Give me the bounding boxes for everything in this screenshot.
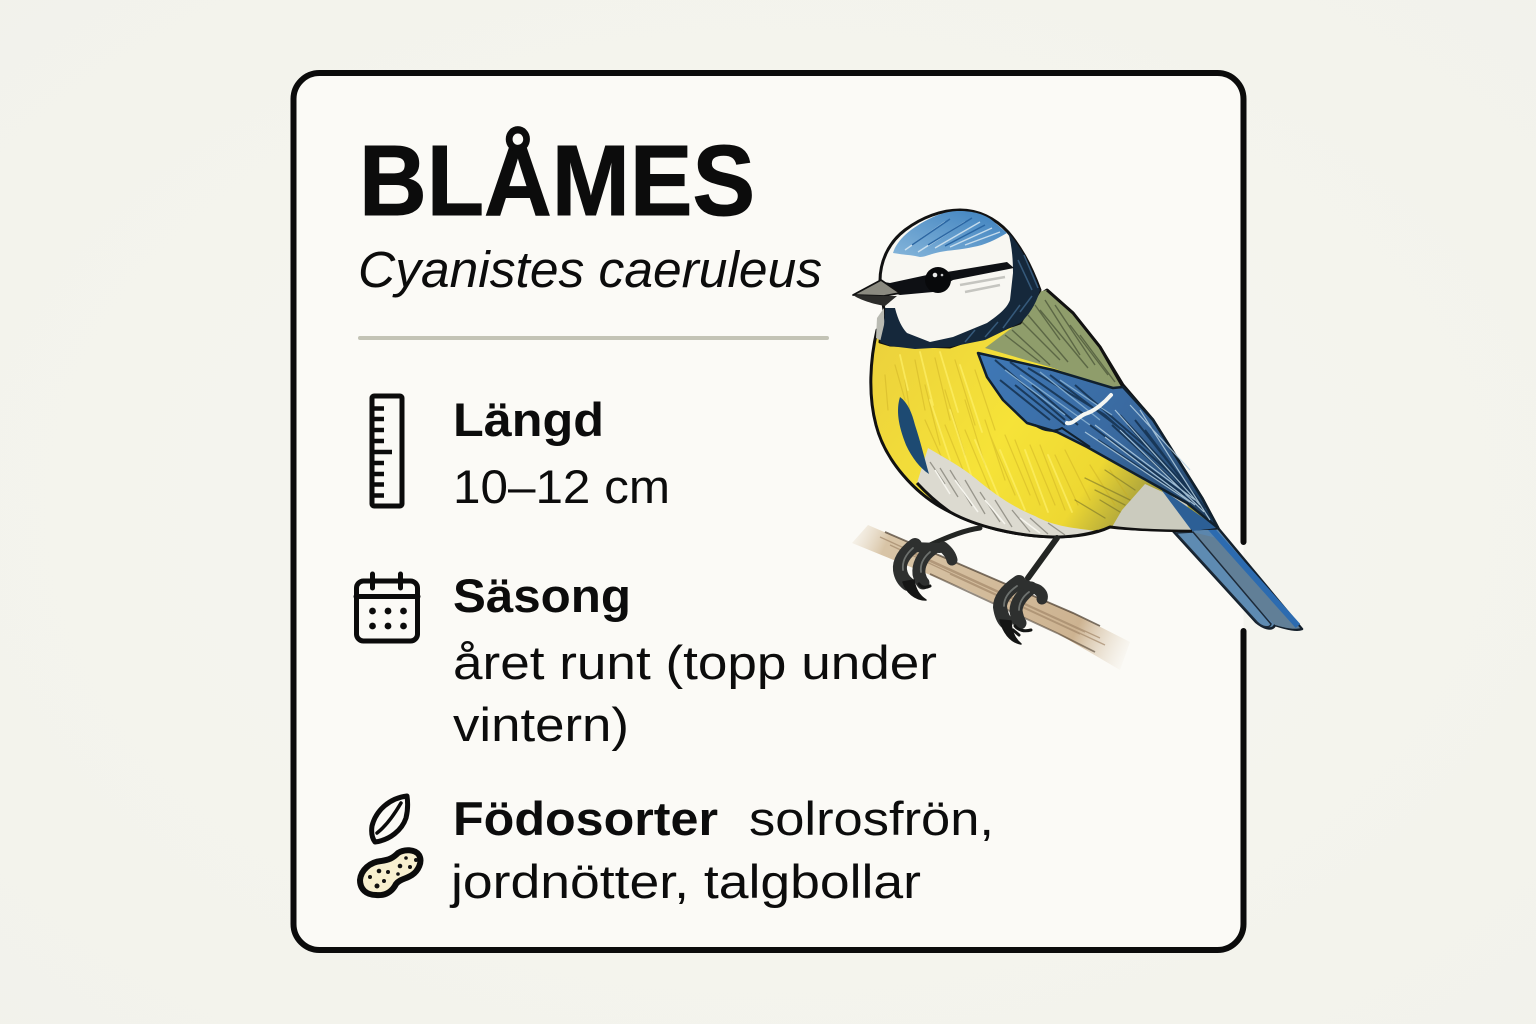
right leg and foot: [1000, 538, 1057, 644]
back: [985, 290, 1123, 389]
tail base under wing: [1160, 488, 1218, 531]
branch: [852, 525, 1130, 670]
value: food: [449, 792, 994, 908]
scientific name: Cyanistes caeruleus: [358, 241, 822, 298]
icon: seed: [372, 796, 408, 842]
body: [871, 290, 1218, 537]
value: season: [453, 636, 937, 751]
eye stripe: [884, 262, 1014, 295]
value: food: jordnötter, talgbollar: [449, 855, 921, 908]
cheek shading: [960, 277, 1005, 292]
breast stripe: [898, 397, 929, 474]
value: season: vintern): [453, 698, 629, 751]
tail: [1173, 515, 1302, 630]
crown: [893, 211, 1007, 257]
left leg and foot: [900, 528, 980, 600]
value: length: 10–12 cm: [453, 460, 670, 513]
belly: [917, 448, 1098, 537]
icon: calendar: [356, 574, 418, 641]
title: BLÅMES: [359, 125, 755, 237]
undertail coverts: [1112, 484, 1192, 531]
beak: [853, 280, 900, 296]
icon: peanut: [360, 850, 420, 895]
heading: food: Födosorter: [453, 792, 718, 845]
throat grey: [876, 308, 884, 342]
yellow feathers: [885, 352, 1135, 518]
value: food: solrosfrön,: [749, 792, 994, 845]
wing: [978, 353, 1218, 528]
illustration: blue tit on branch: [852, 210, 1302, 670]
eye: [925, 267, 951, 293]
heading: length: Längd: [453, 393, 604, 446]
dark collar: [880, 232, 1040, 349]
heading: season: Säsong: [453, 569, 631, 622]
head: [853, 210, 1040, 349]
icon: ruler: [371, 396, 402, 506]
divider: [358, 336, 829, 340]
panel: species card: [294, 73, 1244, 950]
value: season: året runt (topp under: [453, 636, 937, 689]
